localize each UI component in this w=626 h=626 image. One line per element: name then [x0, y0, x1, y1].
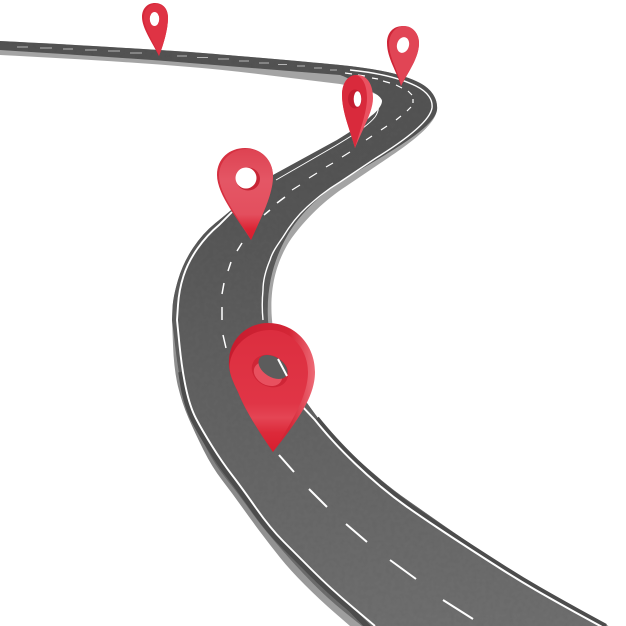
pin 1 hole	[150, 12, 159, 26]
pin 1	[142, 3, 168, 56]
pin 3	[342, 75, 373, 148]
pin 3 hole	[348, 90, 362, 108]
pin 5	[229, 323, 315, 452]
pin 5 hole	[246, 348, 294, 394]
pin 4 hole	[236, 168, 260, 190]
pin 4	[217, 148, 273, 240]
pin 2 hole	[395, 36, 411, 54]
road edge lines	[177, 70, 604, 626]
centre dashes	[17, 47, 473, 619]
pin 2	[387, 26, 419, 86]
road dark shoulder bands	[181, 372, 606, 626]
